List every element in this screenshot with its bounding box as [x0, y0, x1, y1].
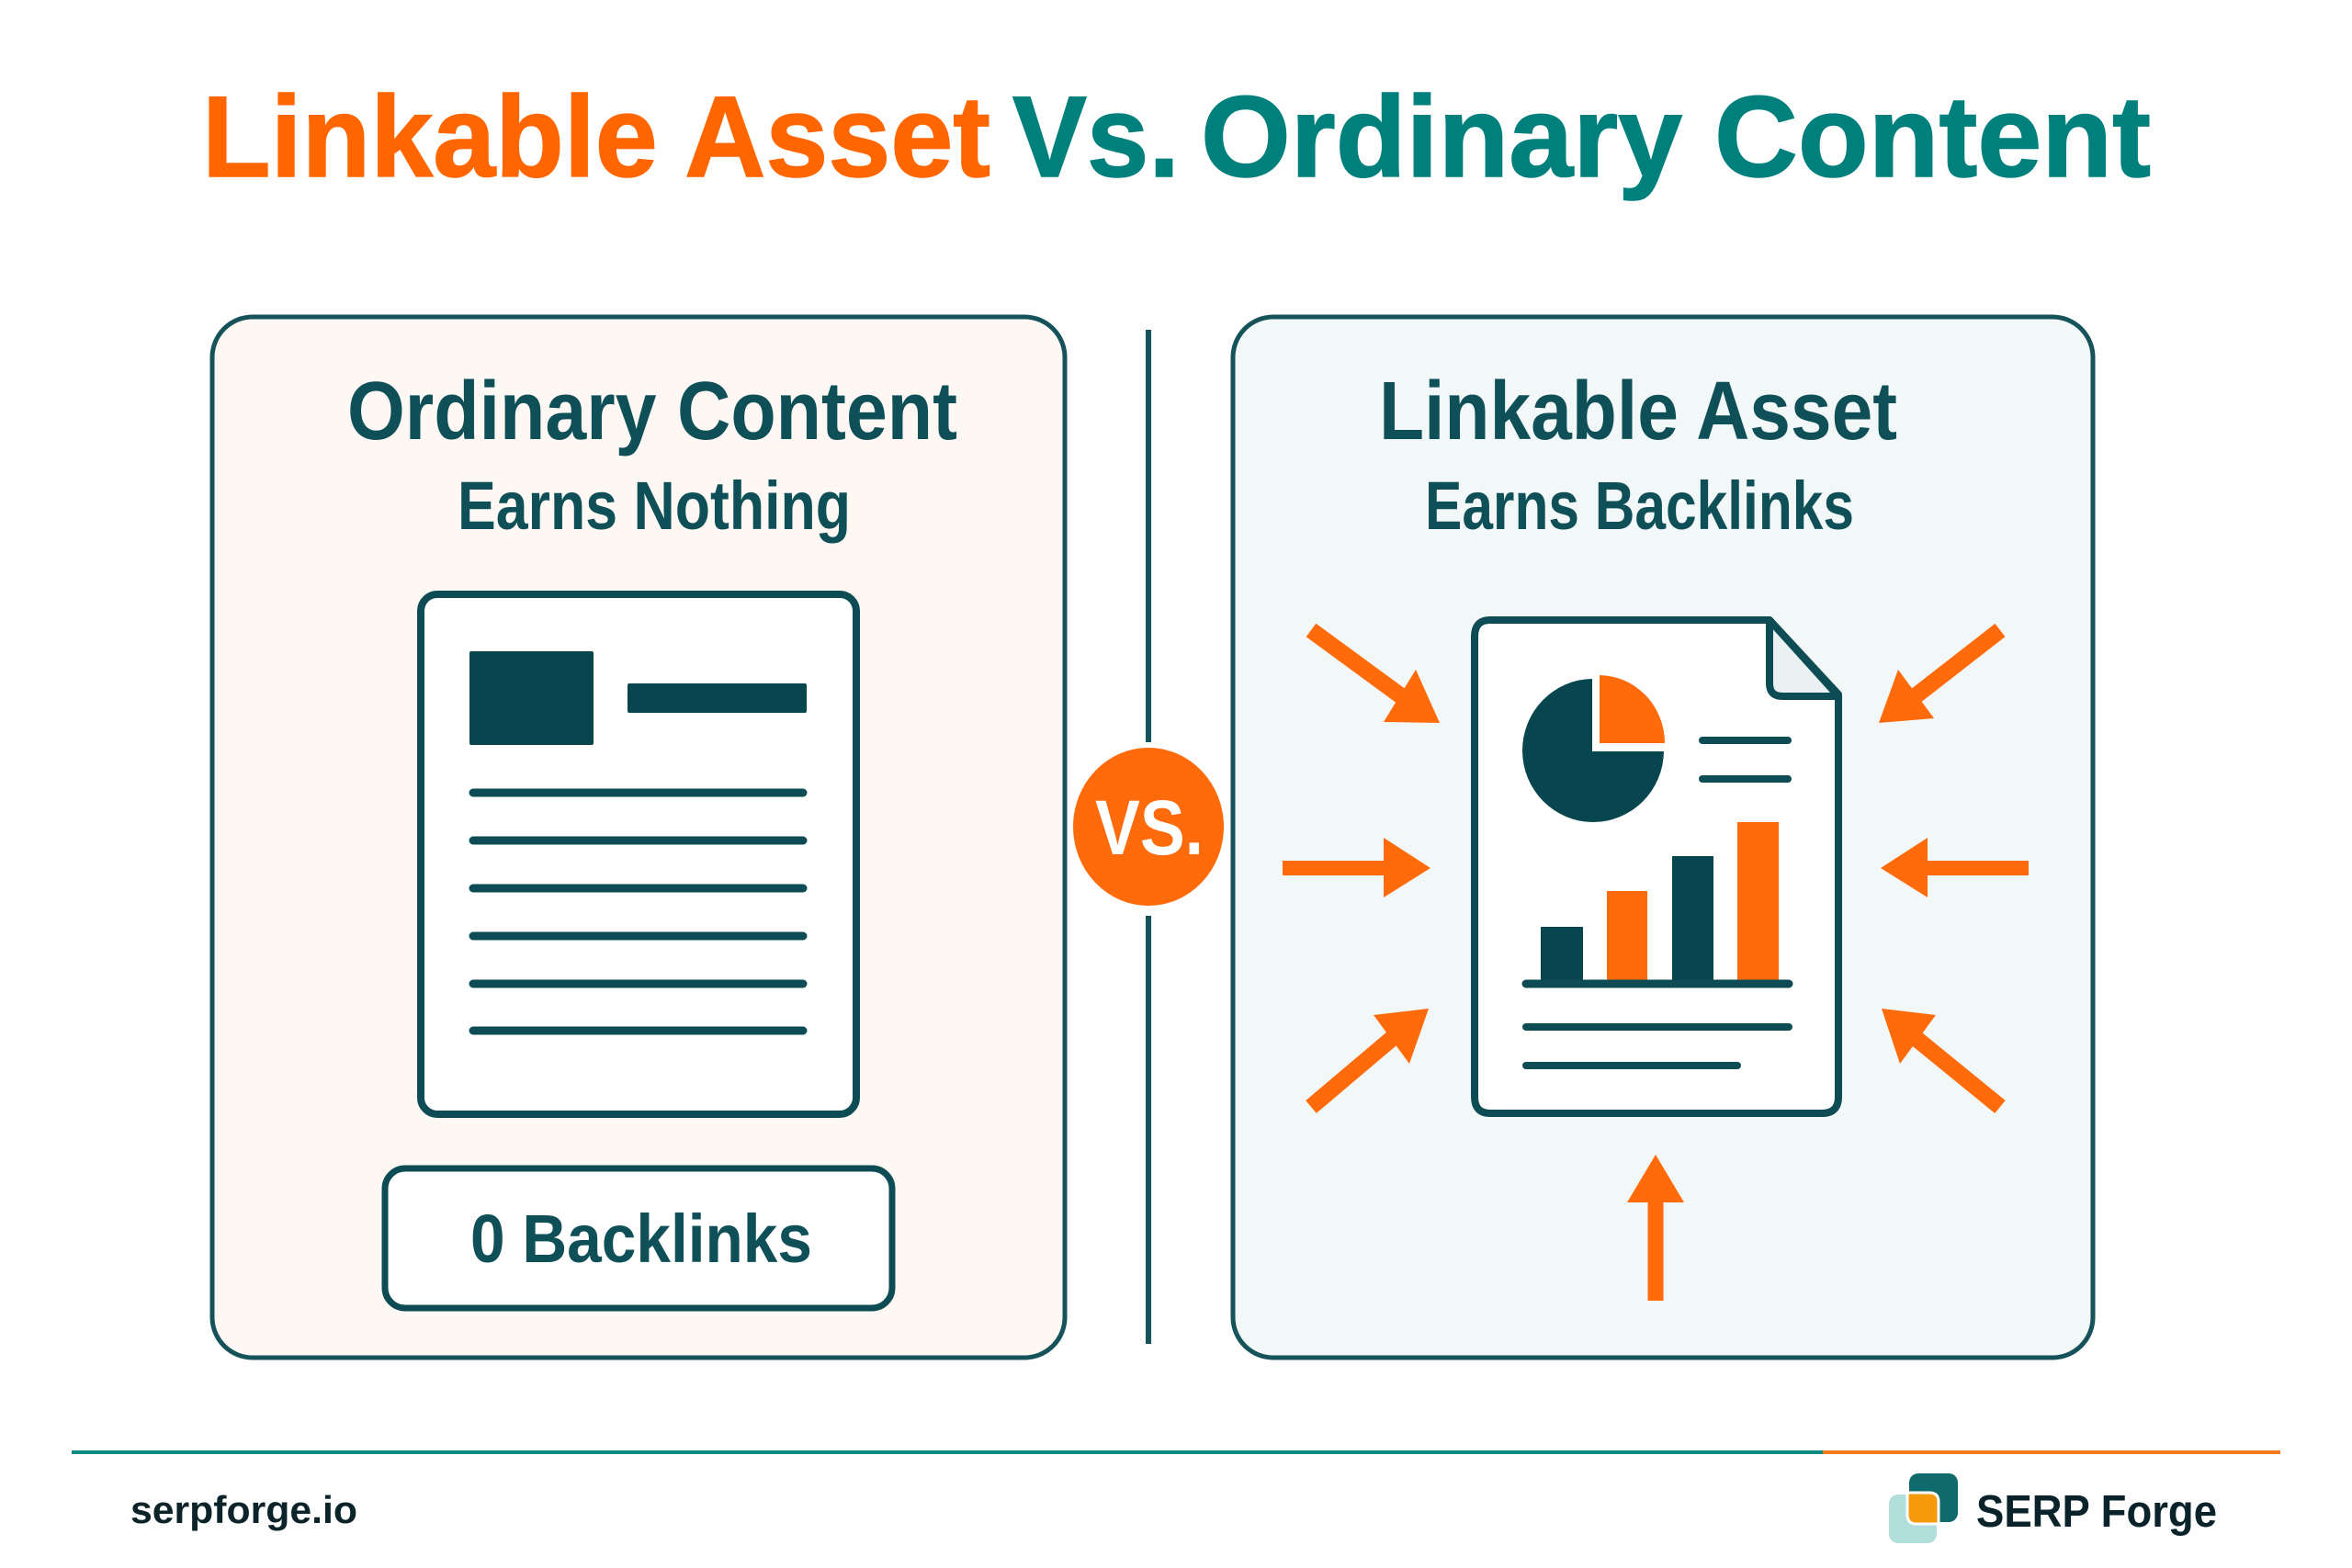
pie chart: [1522, 675, 1665, 822]
arrow: bottom: [1627, 1155, 1684, 1301]
arrow: middle left: [1283, 838, 1430, 897]
arrow: bottom left: [1311, 1009, 1429, 1107]
icon: plain document: [421, 594, 856, 1114]
icon: overlapping squares: [1889, 1473, 1958, 1543]
footer rule: [72, 1450, 2280, 1454]
panel: ordinary content: [212, 317, 1065, 1358]
panel: linkable asset: [1233, 317, 2093, 1358]
callout: 0 backlinks: 0 Backlinks: [470, 1201, 812, 1277]
logo: serp forge: SERP Forge: [1976, 1487, 2217, 1537]
icon: report document: [1475, 620, 1838, 1113]
subheading: earns backlinks: Earns Backlinks: [1425, 468, 1854, 544]
footer url: serpforge.io: [130, 1488, 357, 1531]
callout: 0 backlinks: [385, 1168, 892, 1308]
heading: linkable asset: Linkable Asset: [1379, 366, 1897, 457]
title: [202, 73, 2151, 201]
logo: serp forge: [1889, 1473, 2217, 1543]
title: Vs.: [1012, 73, 1180, 201]
heading: ordinary content: Ordinary Content: [347, 366, 957, 457]
title: Ordinary Content: [1201, 73, 2151, 201]
arrow: middle right: [1881, 838, 2029, 897]
title: Linkable Asset: [202, 73, 990, 201]
subheading: earns nothing: Earns Nothing: [458, 468, 851, 544]
arrows pointing to report: [1283, 630, 2029, 1301]
bar chart: [1526, 822, 1789, 984]
vs divider: VS.: [1095, 784, 1204, 871]
arrow: top left: [1311, 630, 1440, 723]
vs divider: [1073, 330, 1224, 1344]
arrow: top right: [1879, 630, 2000, 723]
arrow: bottom right: [1882, 1009, 2000, 1107]
